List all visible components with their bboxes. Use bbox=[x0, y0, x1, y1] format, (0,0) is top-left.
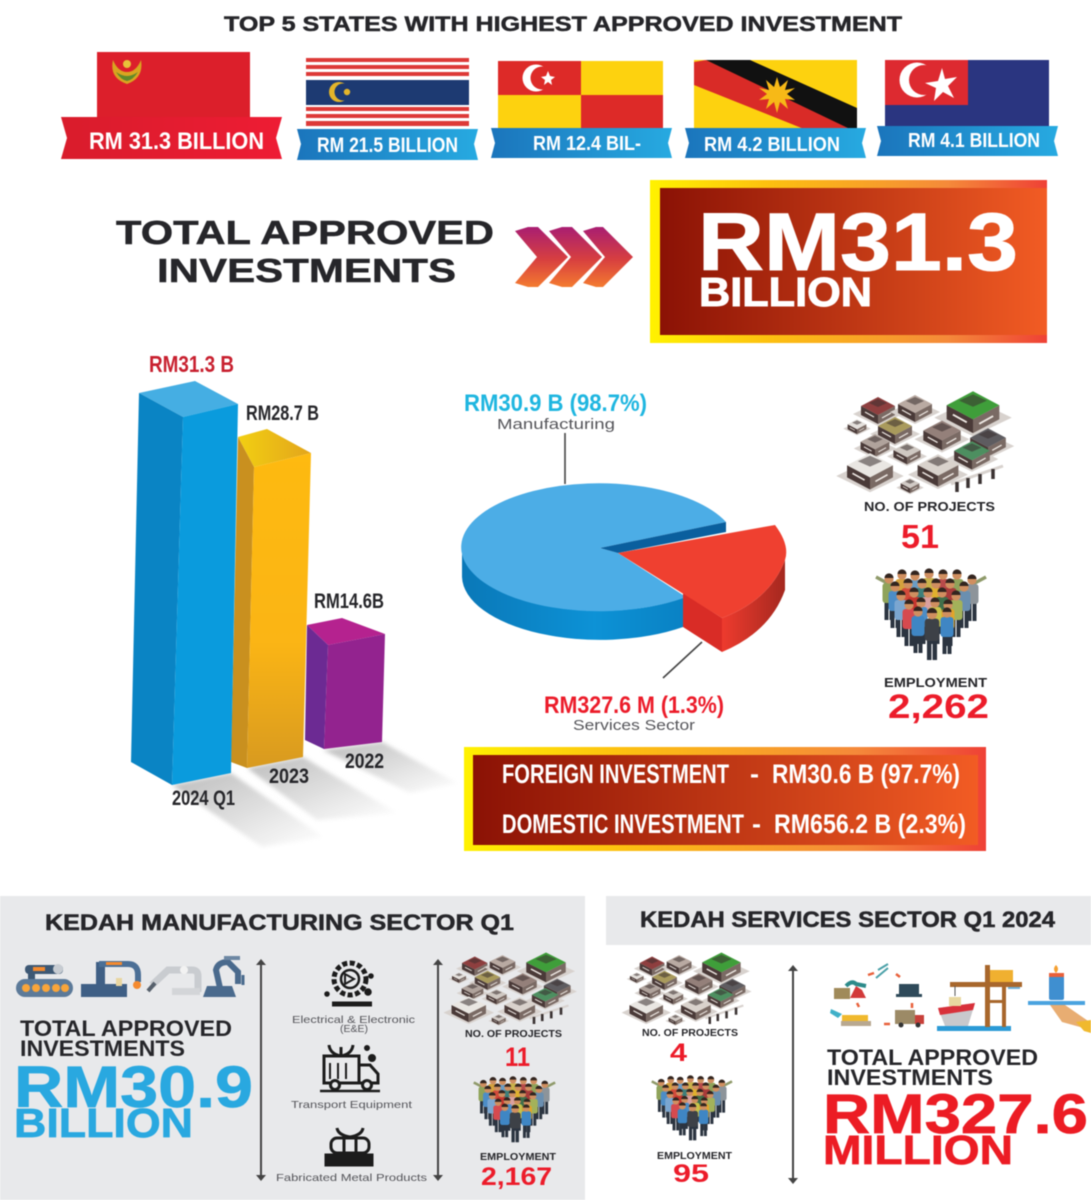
flag: Kedah bbox=[97, 52, 250, 120]
callout: foreign and domestic investment: FOREIGN INVESTMENT bbox=[502, 759, 729, 789]
flag: striped bbox=[306, 58, 469, 127]
heading: total approved investments bbox=[116, 214, 494, 289]
icon: robot arm, blue bbox=[203, 958, 243, 997]
sector: transport equipment: Transport Equipment bbox=[291, 1099, 412, 1111]
label: manufacturing bbox=[464, 390, 647, 433]
stat: number of projects: 51 bbox=[901, 518, 939, 555]
sector: transport equipment bbox=[291, 1045, 412, 1111]
bar chart: yearly approved investment bbox=[131, 351, 457, 847]
title: TOP 5 STATES WITH HIGHEST APPROVED INVESTMENT bbox=[224, 13, 902, 36]
sector: fabricated metal products bbox=[276, 1128, 427, 1184]
sector: fabricated metal products: Fabricated Metal Products bbox=[276, 1172, 427, 1184]
ribbon: RM 4.2 billion: RM 4.2 BILLION bbox=[704, 134, 840, 156]
callout: foreign and domestic investment: RM656.2 B (2.3%) bbox=[774, 809, 966, 839]
ribbon: RM 21.5 billion bbox=[297, 129, 478, 160]
stat: projects 4: 4 bbox=[670, 1039, 687, 1067]
sector: electrical and electronic: (E&E) bbox=[340, 1023, 368, 1035]
label: services: RM327.6 M (1.3%) bbox=[544, 692, 724, 719]
icon: truck bbox=[320, 1045, 380, 1091]
total approved text: TOTAL APPROVED bbox=[827, 1045, 1038, 1070]
total approved text: INVESTMENTS bbox=[20, 1036, 185, 1061]
panel heading: KEDAH SERVICES SECTOR Q1 2024 bbox=[640, 907, 1056, 932]
callout: foreign and domestic investment bbox=[464, 747, 986, 851]
stat: projects 11 bbox=[443, 953, 577, 1072]
stat: projects 11: NO. OF PROJECTS bbox=[465, 1029, 562, 1040]
label: manufacturing: RM30.9 B (98.7%) bbox=[464, 390, 647, 417]
icon: crowd bbox=[876, 568, 986, 660]
pie slice: manufacturing bbox=[461, 483, 726, 640]
stat: employment: 2,262 bbox=[888, 688, 989, 726]
icon: hand with tray bbox=[1028, 965, 1091, 1033]
sector: electrical and electronic bbox=[292, 963, 415, 1035]
figure: RM327.6 million bbox=[823, 1082, 1088, 1173]
bar: 2022 bbox=[305, 590, 385, 773]
bar: 2022: 2022 bbox=[345, 750, 384, 773]
state card: Johor bbox=[877, 60, 1058, 156]
stat: employment 95: 95 bbox=[673, 1160, 709, 1188]
ribbon: RM 4.1 billion bbox=[877, 126, 1058, 156]
state card: Selangor bbox=[491, 61, 672, 158]
icon: robot arm, orange bbox=[81, 962, 141, 997]
bar: 2022: RM14.6B bbox=[314, 590, 384, 613]
total approved text bbox=[20, 1016, 232, 1061]
ribbon: RM 31.3 billion: RM 31.3 BILLION bbox=[89, 128, 264, 155]
callout: foreign and domestic investment: RM30.6 B (97.7%) bbox=[772, 759, 960, 789]
flag: Sarawak bbox=[694, 60, 857, 129]
state card: Kedah bbox=[61, 52, 282, 159]
callout: RM31.3 billion: RM31.3 bbox=[698, 197, 1018, 288]
sector: electrical and electronic: Electrical & Electronic bbox=[292, 1014, 415, 1026]
icon: port crane and ship bbox=[937, 965, 1022, 1031]
callout: foreign and domestic investment: - bbox=[750, 759, 759, 789]
ribbon: RM 12.4 billion bbox=[491, 128, 672, 158]
icon: gear bbox=[326, 963, 372, 1004]
ribbon: RM 12.4 billion: RM 12.4 BIL- bbox=[533, 133, 641, 155]
state card: Melaka bbox=[297, 58, 478, 160]
panel heading: KEDAH MANUFACTURING SECTOR Q1 bbox=[45, 910, 514, 935]
figure: RM327.6 million: MILLION bbox=[823, 1127, 1013, 1173]
figure: RM30.9 billion: BILLION bbox=[14, 1100, 193, 1146]
bar: 2023 bbox=[231, 402, 319, 788]
icon: logistics bbox=[830, 964, 924, 1028]
figure: RM30.9 billion bbox=[14, 1055, 253, 1146]
heading: total approved investments: TOTAL APPROVED bbox=[116, 214, 494, 251]
arrow: divider left bbox=[256, 959, 266, 1181]
stat: employment bbox=[876, 568, 989, 726]
bar: 2024 Q1 bbox=[131, 351, 238, 810]
pie chart: sector split bbox=[461, 390, 786, 734]
arrow: divider right bbox=[433, 959, 443, 1181]
stat: employment: EMPLOYMENT bbox=[884, 675, 987, 690]
flag: Selangor bbox=[498, 61, 663, 129]
panel: Kedah manufacturing sector bbox=[0, 896, 585, 1200]
pie slice: services bbox=[618, 525, 786, 652]
panel: Kedah services sector bbox=[606, 896, 1091, 1188]
callout: RM31.3 billion: BILLION bbox=[699, 269, 872, 315]
arrow: divider bbox=[788, 965, 798, 1184]
stat: number of projects bbox=[836, 391, 1014, 555]
icon: conveyor bbox=[16, 964, 73, 997]
stat: projects 11: 11 bbox=[505, 1042, 530, 1072]
icon: factories bbox=[836, 391, 1014, 494]
total approved text: TOTAL APPROVED bbox=[20, 1016, 232, 1041]
total approved text bbox=[827, 1045, 1038, 1090]
panel heading bbox=[606, 896, 1091, 945]
total approved text: INVESTMENTS bbox=[827, 1065, 993, 1090]
callout: foreign and domestic investment: DOMESTIC INVESTMENT bbox=[502, 809, 744, 839]
bar: 2024 Q1: 2024 Q1 bbox=[172, 787, 235, 810]
heading: total approved investments: INVESTMENTS bbox=[157, 252, 456, 289]
state card: Sarawak bbox=[685, 60, 866, 158]
flag: Johor bbox=[885, 60, 1049, 127]
icon: metal bbox=[326, 1128, 372, 1165]
ribbon: RM 4.2 billion bbox=[685, 128, 866, 158]
stat: employment 95: EMPLOYMENT bbox=[657, 1151, 732, 1162]
label: services bbox=[544, 692, 724, 734]
ribbon: RM 31.3 billion bbox=[61, 117, 282, 159]
ribbon: RM 21.5 billion: RM 21.5 BILLION bbox=[317, 134, 458, 157]
icon: factories bbox=[443, 953, 577, 1026]
label: services: Services Sector bbox=[573, 717, 695, 734]
stat: projects 4: NO. OF PROJECTS bbox=[642, 1028, 738, 1039]
figure: RM30.9 billion: RM30.9 bbox=[14, 1055, 253, 1120]
bar: 2023: RM28.7 B bbox=[246, 402, 319, 425]
figure: RM327.6 million: RM327.6 bbox=[823, 1082, 1088, 1145]
bar: 2023: 2023 bbox=[269, 765, 309, 788]
icon: factories bbox=[622, 953, 752, 1026]
icon: crowd bbox=[474, 1076, 555, 1142]
label: manufacturing: Manufacturing bbox=[497, 416, 615, 433]
icon: crowd bbox=[652, 1075, 732, 1140]
stat: employment 95 bbox=[652, 1075, 732, 1188]
ribbon: RM 4.1 billion: RM 4.1 BILLION bbox=[908, 130, 1040, 152]
callout: RM31.3 billion bbox=[650, 180, 1047, 343]
icon: robot arm, grey bbox=[148, 966, 200, 995]
stat: employment 2,167: 2,167 bbox=[481, 1163, 552, 1191]
stat: number of projects: NO. OF PROJECTS bbox=[864, 499, 995, 514]
arrow: triple chevron bbox=[515, 227, 633, 287]
callout: foreign and domestic investment: - bbox=[752, 809, 761, 839]
stat: employment 2,167 bbox=[474, 1076, 556, 1191]
bar: 2024 Q1: RM31.3 B bbox=[149, 351, 234, 377]
stat: projects 4 bbox=[622, 953, 752, 1067]
stat: employment 2,167: EMPLOYMENT bbox=[480, 1152, 556, 1163]
